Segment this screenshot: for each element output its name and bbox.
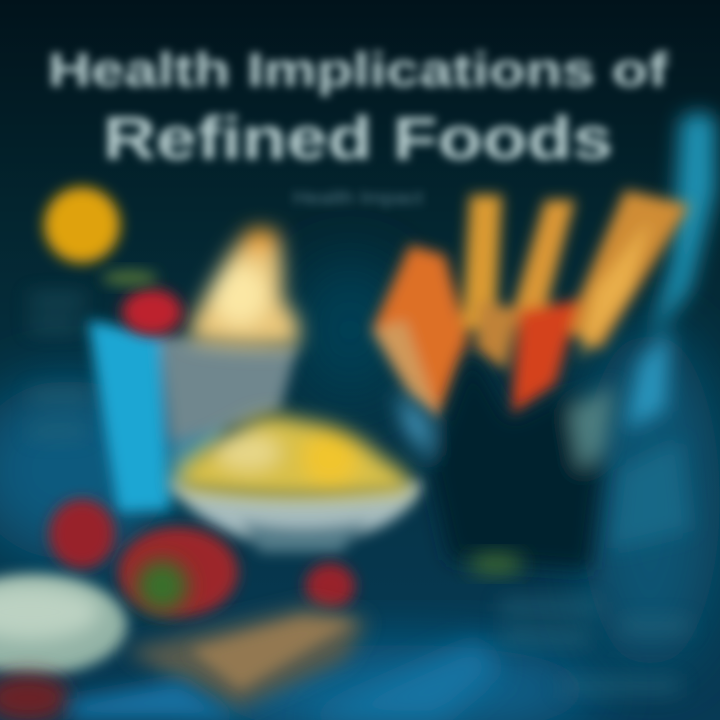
left sidebar faint text [30,295,90,437]
subtitle: Health Impact [293,188,423,208]
bottom-right faint text block [500,600,690,692]
title: Refined Foods [103,105,613,172]
plate and crackers bottom left [0,575,500,720]
bowl of yellow chips [168,416,425,552]
blue cup with ice cream [88,228,300,512]
fries in dark cone [372,190,690,570]
title [48,43,668,172]
right blue ribbon [610,112,716,550]
cone [395,350,615,570]
sticks [372,190,690,420]
icon: yellow sun circle [44,187,120,263]
cup [88,320,298,512]
title: Health Implications of [48,43,668,96]
tomatoes and berries [49,499,524,617]
cream [190,228,300,347]
strawberry on cup [122,289,182,335]
